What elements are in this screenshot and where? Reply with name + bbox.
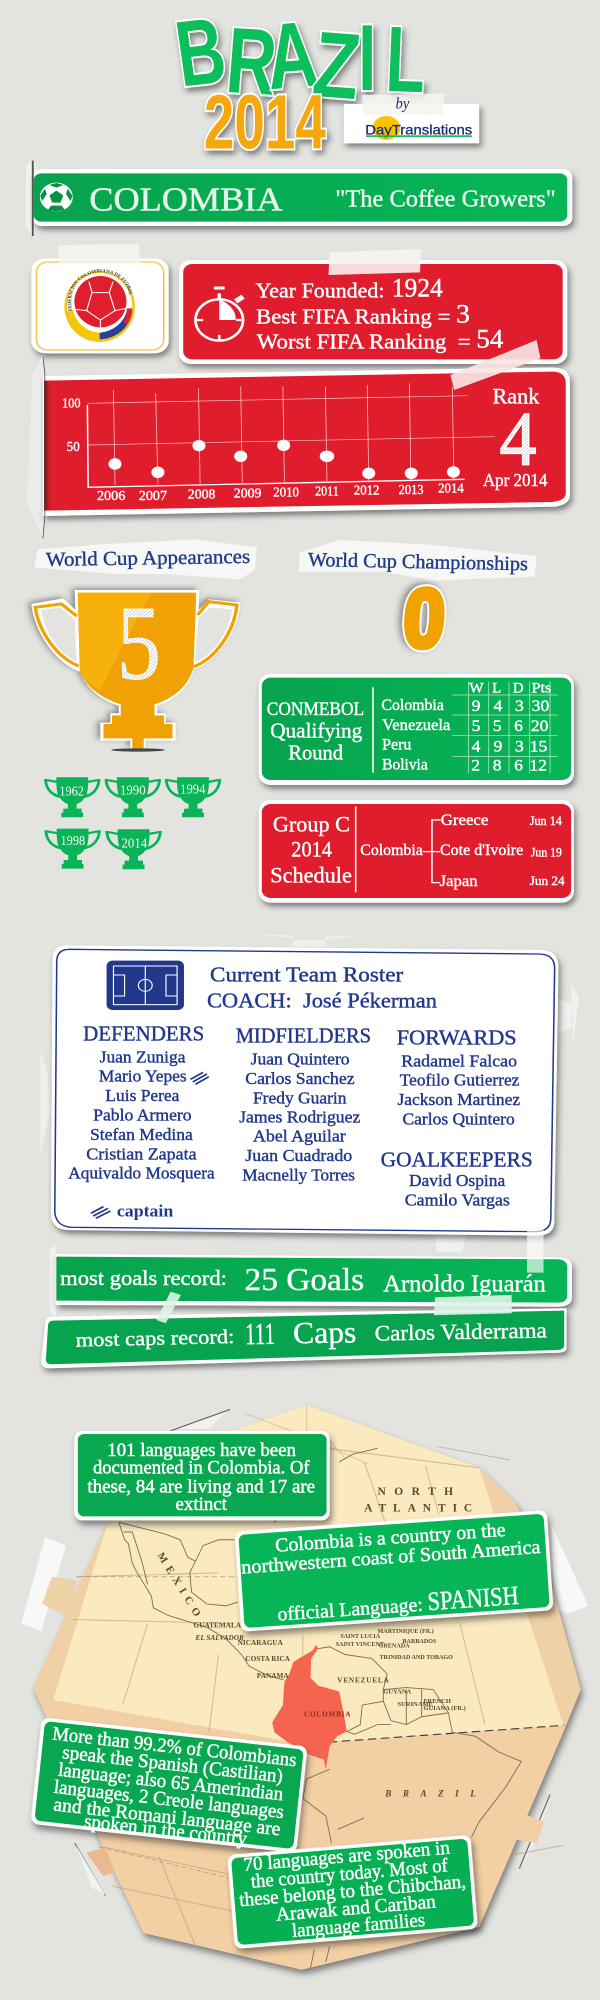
bracket of matches: Cote d'Ivoire <box>440 841 523 859</box>
trophy: 1990 <box>105 777 161 817</box>
language map section <box>21 1405 588 1970</box>
callout: Spanish speakers: language; also 65 Amerindian <box>57 1760 285 1806</box>
trophy: 1990: 1990 <box>120 783 146 798</box>
panel: most caps record <box>41 1292 567 1368</box>
fact: year founded: Year Founded: <box>256 279 384 302</box>
icon: large trophy with 5 appearances <box>31 584 241 752</box>
standings table: Bolivia <box>382 755 428 773</box>
roster and records section <box>40 935 579 1368</box>
fact: worst FIFA ranking: 54 <box>476 325 503 354</box>
trophy: 1962: 1962 <box>59 785 84 799</box>
title: 2014: 2014 <box>204 79 326 165</box>
country labels: COLOMBIA <box>304 1710 351 1719</box>
current rank: Rank <box>493 385 539 409</box>
standings table <box>381 681 558 774</box>
list: midfielders: Juan Quintero <box>251 1050 350 1069</box>
list: goalkeepers: GOALKEEPERS <box>381 1148 533 1171</box>
line chart: 2006 <box>97 489 125 504</box>
title: BRAZIL <box>170 0 427 119</box>
list: defenders: Stefan Medina <box>90 1125 193 1145</box>
coastlines and borders <box>119 1446 521 1968</box>
standings table: Colombia <box>381 696 444 714</box>
bracket of matches: Jun 14 <box>530 814 562 828</box>
list: forwards: Radamel Falcao <box>401 1052 517 1071</box>
list: defenders: Pablo Armero <box>93 1106 192 1125</box>
country labels: VENEZUELA <box>337 1675 389 1685</box>
panel title: 2014 <box>291 837 332 862</box>
country labels: SAINT LUCIA <box>340 1634 381 1640</box>
list: midfielders: Macnelly Torres <box>242 1166 355 1185</box>
trophy: 1994 <box>165 777 221 817</box>
country labels: PANAMA <box>257 1671 289 1680</box>
country labels: SURINAME <box>397 1701 433 1708</box>
country labels: GUYANA <box>383 1688 411 1695</box>
heading: World Cup Championships <box>299 540 537 581</box>
heading: World Cup Championships: World Cup Championships <box>308 548 528 575</box>
trophy: 1998 <box>44 829 101 869</box>
country labels: GRENADA <box>379 1643 410 1650</box>
callout: Spanish speakers: languages, 2 Creole languages <box>53 1777 285 1823</box>
callout: number of languages documented: extinct <box>176 1494 228 1515</box>
callout: language families <box>227 1835 478 1949</box>
title: BRAZIL: A <box>261 1 323 109</box>
country labels: NICARAGUA <box>238 1638 284 1647</box>
country labels: SAINT VINCENT <box>336 1642 385 1648</box>
line chart: 50 <box>67 440 80 455</box>
panel title: Qualifying <box>270 719 363 742</box>
list: defenders: Mario Yepes <box>99 1067 187 1086</box>
trophy: 1962 <box>44 777 100 817</box>
panel title: Round <box>288 741 344 764</box>
list: goalkeepers <box>381 1148 533 1210</box>
callout: language families: Arawak and Cariban <box>275 1891 437 1926</box>
bracket of matches: Japan <box>440 872 478 890</box>
Colombia highlighted <box>272 1645 347 1769</box>
panel title: CONMEBOL <box>267 697 364 720</box>
standings table: 9 <box>472 697 480 715</box>
callout: number of languages documented <box>74 1431 330 1520</box>
callout: number of languages documented: these, 84 are living and 17 are <box>87 1476 315 1497</box>
panel: FIFA rank chart <box>27 340 570 538</box>
title: BRAZIL: Z <box>309 11 365 119</box>
current rank: Apr 2014 <box>483 471 548 491</box>
list: defenders: Aquivaldo Mosquera <box>68 1164 215 1183</box>
callout: Spanish speakers: spoken in the country <box>83 1811 248 1850</box>
country labels: MARTINIQUE (FR.) <box>378 1628 434 1635</box>
panel: most goals record: 25 Goals <box>245 1262 364 1297</box>
standings table: Venezuela <box>382 716 451 734</box>
panel: CONMEBOL qualifying table <box>259 674 574 785</box>
standings table: 5 <box>493 717 502 735</box>
list: midfielders: Juan Cuadrado <box>245 1146 352 1166</box>
panel: most caps record: 111 <box>245 1318 275 1352</box>
standings table: Pts <box>532 681 551 696</box>
team nickname: "The Coffee Growers" <box>335 185 556 212</box>
heading: World Cup Appearances: World Cup Appearances <box>46 545 250 571</box>
list: midfielders: James Rodriguez <box>239 1107 360 1127</box>
country labels: EL SALVADOR <box>194 1633 244 1642</box>
callout: language families: these belong to the Chibchan, <box>238 1871 467 1911</box>
title: BRAZIL: I <box>358 5 376 110</box>
panel: most caps record: Carlos Valderrama <box>374 1319 548 1346</box>
country labels: FRENCH <box>424 1698 451 1705</box>
callout: number of languages documented: 101 languages have been <box>107 1440 296 1461</box>
line chart: 2012 <box>354 484 379 498</box>
legend: captain <box>91 1202 173 1220</box>
world cup section <box>31 539 574 903</box>
country labels: MEXICO <box>155 1551 206 1624</box>
line chart: 2008 <box>188 487 215 502</box>
roster heading: COACH: José Pékerman <box>207 989 437 1012</box>
trophy: 2014: 2014 <box>122 836 147 851</box>
list: defenders: Cristian Zapata <box>86 1144 197 1164</box>
standings table: 3 <box>515 697 524 715</box>
list: defenders <box>68 1022 215 1183</box>
country labels: BRAZIL <box>384 1789 487 1800</box>
logo: Day Translations: by <box>396 94 410 112</box>
map of the Americas <box>33 1405 581 1970</box>
list: defenders: DEFENDERS <box>83 1022 204 1045</box>
standings table: 4 <box>493 697 502 715</box>
trophy: 1998: 1998 <box>61 834 85 849</box>
header section <box>26 0 572 237</box>
list: midfielders: Fredy Guarin <box>253 1088 347 1108</box>
standings table: Peru <box>382 735 411 753</box>
line chart: 2010 <box>273 486 299 500</box>
country labels: COSTA RICA <box>245 1654 291 1663</box>
callout: language families: language families <box>291 1910 426 1942</box>
callout: number of languages documented: documented in Colombia. Of <box>93 1458 310 1479</box>
fact: best FIFA ranking: 3 <box>456 299 470 329</box>
panel title <box>270 812 352 888</box>
panel: crest card <box>29 244 176 362</box>
icon: stopwatch <box>195 288 243 341</box>
panel: most goals record: Arnoldo Iguarán <box>383 1270 546 1297</box>
bracket of matches <box>360 811 565 890</box>
standings table: 8 <box>493 757 502 774</box>
line chart: 2013 <box>399 483 424 498</box>
fact: year founded <box>256 273 443 303</box>
standings table: 9 <box>493 738 502 755</box>
list: forwards: Jackson Martinez <box>397 1090 520 1110</box>
title: BRAZIL: L <box>384 6 427 112</box>
standings table: W <box>469 681 484 696</box>
icon: large trophy with 5 appearances: 5 <box>117 584 161 702</box>
country labels: BARBADOS <box>402 1639 437 1645</box>
list: midfielders: Carlos Sanchez <box>245 1069 355 1089</box>
callout: official language: SPANISH <box>427 1581 520 1616</box>
country labels: GUATEMALA <box>194 1620 242 1629</box>
trophy: 2014 <box>105 829 162 869</box>
legend: captain: captain <box>117 1202 173 1220</box>
logo: Day Translations <box>344 93 479 143</box>
line chart: 2009 <box>234 486 261 501</box>
standings table: D <box>513 681 524 696</box>
line chart: 100 <box>62 397 80 411</box>
standings table: 6 <box>514 717 523 735</box>
panel: most caps record: Caps <box>293 1316 357 1351</box>
standings table: 5 <box>472 717 480 735</box>
roster heading <box>207 963 437 1012</box>
current rank: 4 <box>499 397 537 482</box>
country labels: GUIANA (FR.) <box>424 1705 466 1712</box>
country labels: ATLANTIC <box>364 1501 479 1514</box>
panel: Group C schedule <box>259 800 574 903</box>
callout: Spanish speakers: speak the Spanish (Castilian) <box>61 1742 284 1787</box>
title: BRAZIL: R <box>223 9 281 115</box>
fact: worst FIFA ranking: Worst FIFA Ranking = <box>257 330 471 353</box>
standings table: 20 <box>531 717 548 735</box>
bracket of matches: Jun 24 <box>530 874 565 888</box>
fact: year founded: 1924 <box>392 273 443 303</box>
callout: official language: official Language: <box>277 1595 424 1626</box>
country labels: NORTH <box>378 1485 461 1498</box>
panel: current team roster <box>40 935 579 1252</box>
list: defenders: Luis Perea <box>105 1086 180 1106</box>
list: forwards <box>397 1026 520 1129</box>
callout: official language <box>235 1510 553 1632</box>
bracket of matches: Colombia <box>360 841 423 859</box>
list: forwards: Carlos Quintero <box>402 1109 515 1129</box>
bracket of matches: Greece <box>441 811 488 829</box>
team facts section <box>27 244 577 538</box>
panel title <box>267 697 364 764</box>
line chart: 2011 <box>315 485 339 499</box>
fact: best FIFA ranking: Best FIFA Ranking = <box>256 305 450 328</box>
standings table: 6 <box>514 757 523 774</box>
standings table: 12 <box>529 757 547 774</box>
callout: official language: Colombia is a country on the <box>274 1520 506 1557</box>
standings table: L <box>492 681 501 696</box>
panel: most caps record: most caps record: <box>75 1325 235 1351</box>
list: midfielders: Abel Aguilar <box>253 1127 346 1146</box>
panel: most goals record <box>50 1209 572 1317</box>
icon: football pitch <box>107 961 184 1010</box>
standings table: 4 <box>472 738 480 755</box>
icon: zero championships: 0 <box>401 572 447 664</box>
standings table: 3 <box>515 738 524 755</box>
icon: football <box>40 183 73 211</box>
line chart: 2014 <box>438 482 464 496</box>
standings table: 15 <box>530 738 547 755</box>
line chart <box>62 383 494 504</box>
team name: COLOMBIA <box>89 181 283 218</box>
heading: World Cup Appearances <box>34 539 257 579</box>
appearance years <box>44 777 221 869</box>
list: midfielders <box>236 1024 371 1185</box>
panel title: Schedule <box>270 863 352 888</box>
country labels <box>155 1485 487 1800</box>
panel: founding and FIFA ranking <box>179 249 567 364</box>
country labels: TRINIDAD AND TOBAGO <box>379 1655 453 1661</box>
icon: federation crest: FEDERACION COLOMBIANA DE FUTBOL <box>68 269 132 311</box>
graticule <box>73 1405 563 1946</box>
bracket of matches: Jun 19 <box>531 845 562 859</box>
callout: language families: the country today. Most of <box>250 1855 449 1893</box>
list: goalkeepers: David Ospina <box>409 1171 506 1191</box>
list: goalkeepers: Camilo Vargas <box>405 1190 510 1210</box>
logo: Day Translations: DayTranslations <box>365 122 472 138</box>
callout: Spanish speakers <box>30 1717 308 1856</box>
panel: most goals record: most goals record: <box>60 1266 227 1290</box>
list: forwards: Teofilo Gutierrez <box>400 1071 519 1090</box>
banner: Colombia team name <box>26 160 572 237</box>
list: defenders: Juan Zuniga <box>100 1047 186 1067</box>
trophy: 1994: 1994 <box>180 782 205 797</box>
panel title: Group C <box>273 812 350 837</box>
roster heading: Current Team Roster <box>210 963 404 986</box>
list: forwards: FORWARDS <box>397 1026 517 1049</box>
line chart: 2007 <box>139 489 167 504</box>
standings table: 2 <box>471 757 480 774</box>
tape strips <box>21 1409 588 1896</box>
callout: Spanish speakers: and the Romani language are <box>52 1794 281 1840</box>
callout: Spanish speakers: More than 99.2% of Colombians <box>51 1723 298 1771</box>
list: midfielders: MIDFIELDERS <box>236 1024 371 1047</box>
title: BRAZIL: B <box>170 0 232 107</box>
current rank <box>483 385 548 491</box>
callout: official language: northwestern coast of South America <box>241 1537 542 1579</box>
icon: zero championships: 0 <box>401 572 447 664</box>
standings table: 30 <box>532 697 549 715</box>
callout: language families: 70 languages are spoken in <box>243 1838 451 1876</box>
